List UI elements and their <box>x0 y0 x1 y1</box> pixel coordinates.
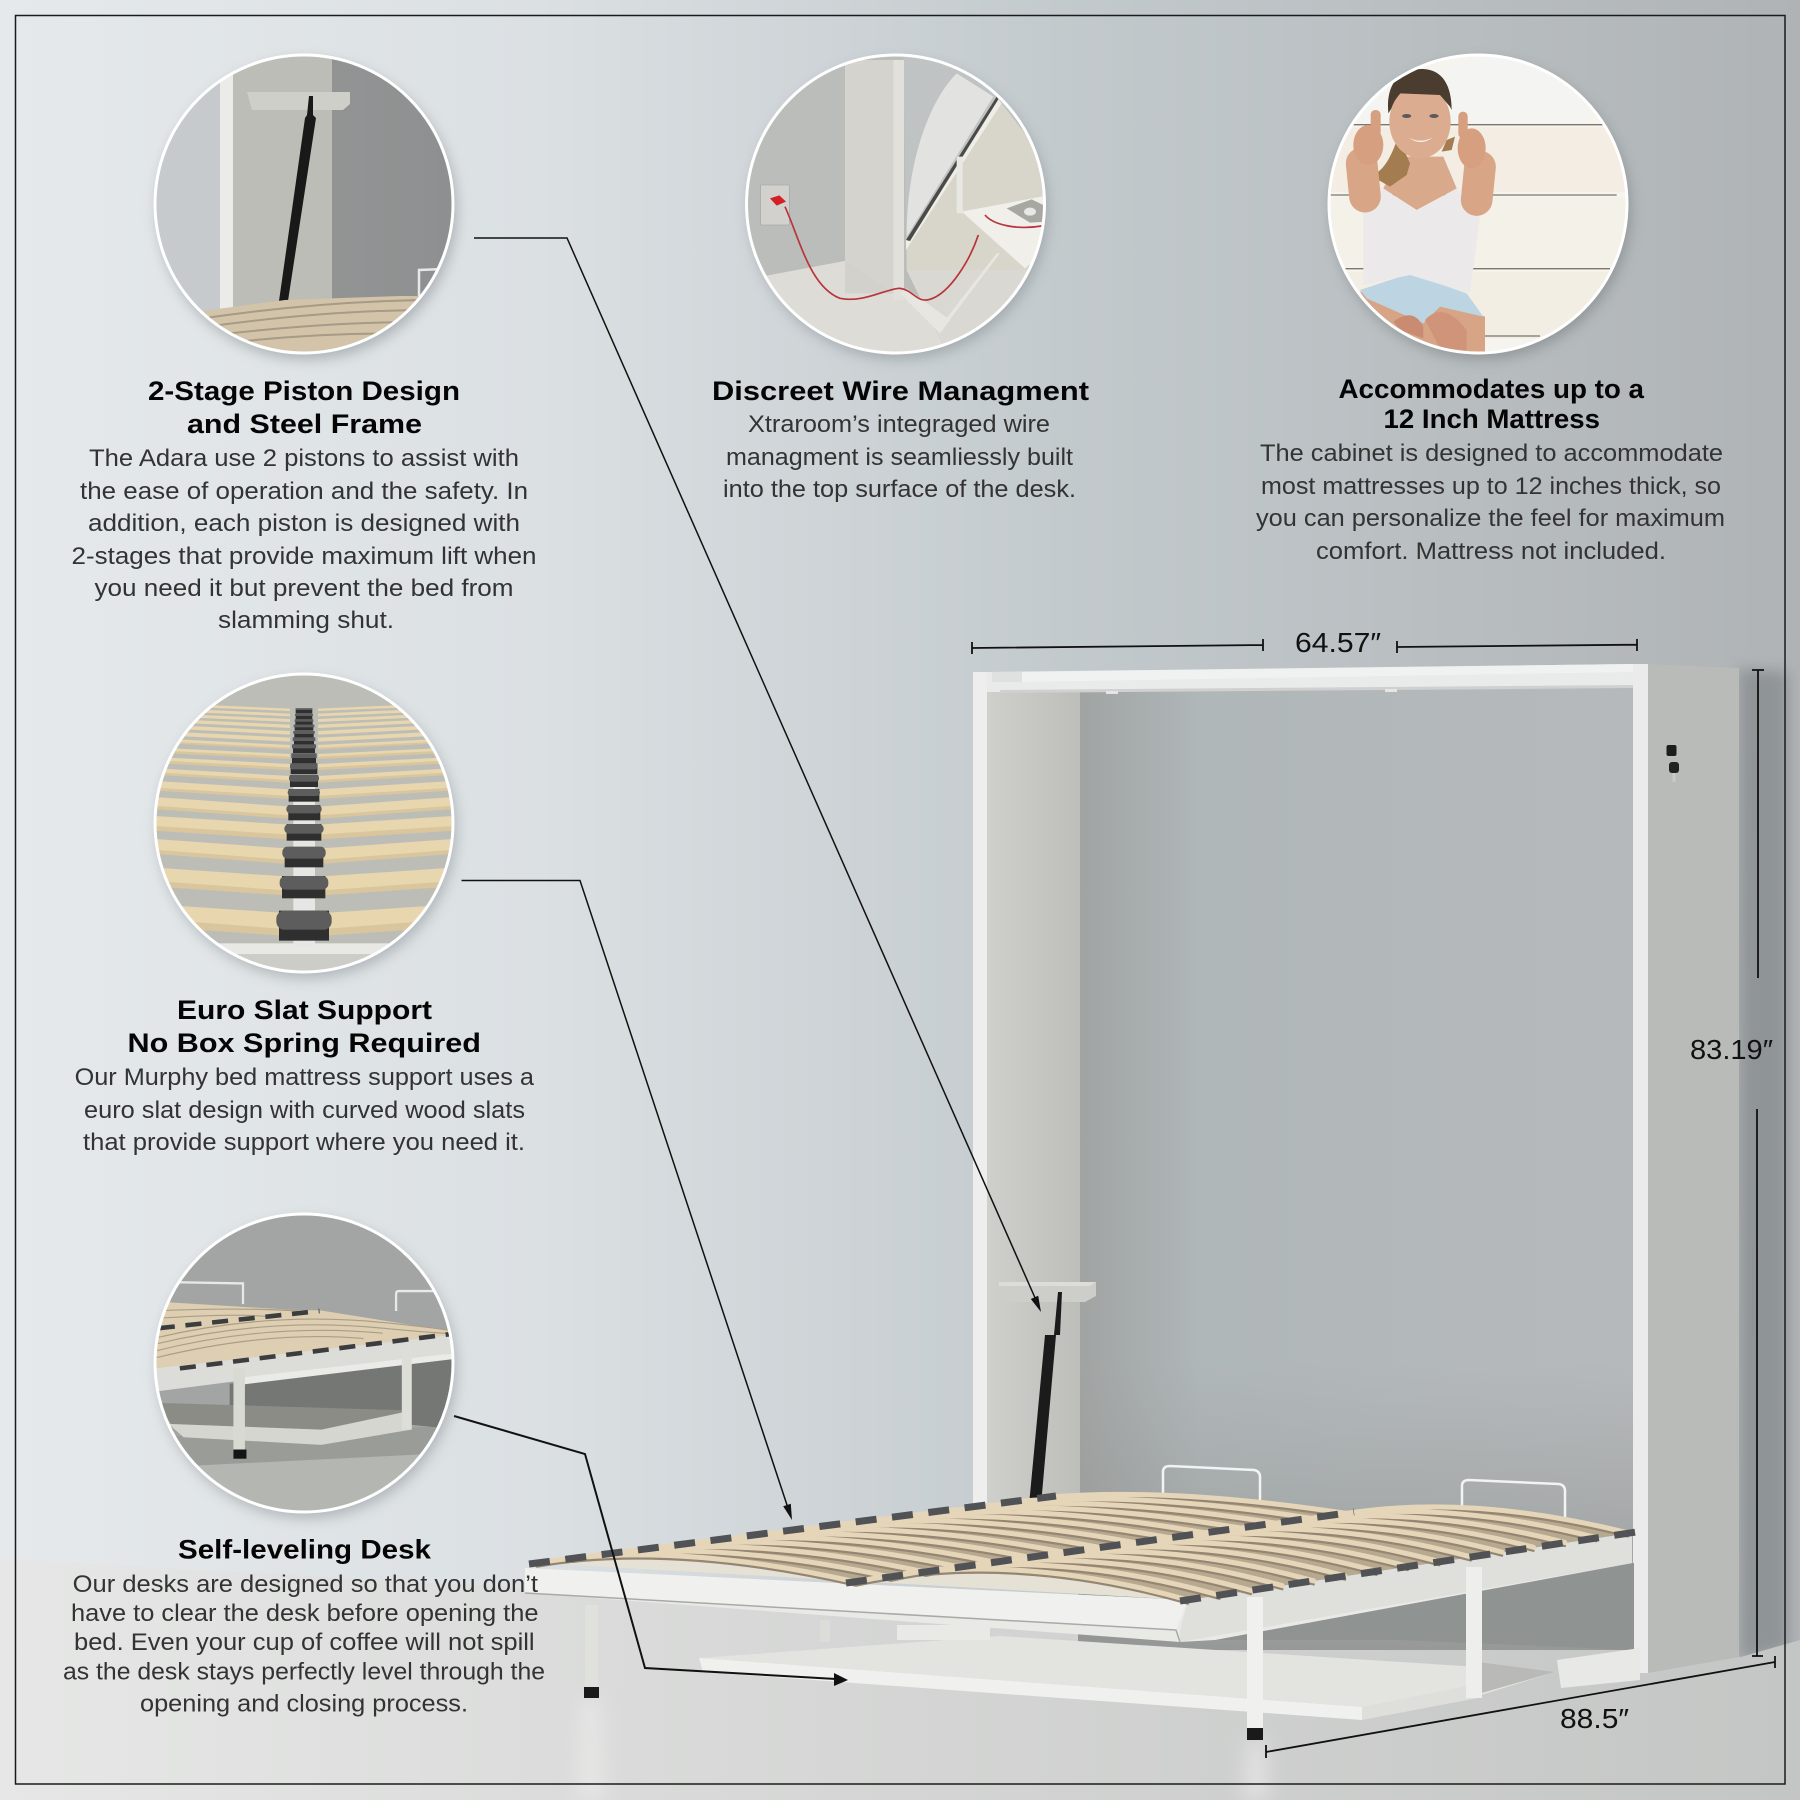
cabinet: back wall interior <box>1078 690 1638 1650</box>
desk tray <box>699 1636 1555 1720</box>
photo: piston close-up <box>155 55 455 360</box>
body text <box>723 411 1076 503</box>
body text: Our desks are designed so that you don’t <box>73 1571 538 1598</box>
panel: mattress feature <box>1256 50 1725 565</box>
slat end caps <box>529 1496 1636 1601</box>
body text: comfort. Mattress not included. <box>1316 538 1666 565</box>
photo: woman with mattresses <box>1330 56 1626 352</box>
under-bed shadow <box>1215 1563 1634 1650</box>
arrow: piston callout <box>474 238 1041 1312</box>
heading <box>128 995 481 1058</box>
photo: desk and bed close-up <box>156 1216 452 1510</box>
dimension: width 64.57: 64.57″ <box>1295 627 1381 658</box>
body text: bed. Even your cup of coffee will not spill <box>74 1629 535 1656</box>
heading: Euro Slat Support <box>177 995 432 1025</box>
heading <box>148 376 460 439</box>
bed underside panels <box>525 1533 1632 1642</box>
heading: Self-leveling Desk <box>178 1535 432 1565</box>
gas piston <box>1029 1292 1062 1505</box>
heading: Accommodates up to a <box>1338 374 1645 404</box>
dimension: width 64.57 <box>972 627 1637 658</box>
cabinet: left side panel <box>973 672 1080 1510</box>
body text <box>72 445 536 634</box>
panel: wire management feature <box>712 53 1089 503</box>
heading: 2-Stage Piston Design <box>148 376 460 406</box>
dimension: depth 88.5: 88.5″ <box>1560 1703 1629 1734</box>
icon: lock and key <box>1666 745 1679 782</box>
dimension: height 83.19 <box>1690 670 1773 1656</box>
dimension: depth 88.5 <box>1266 1656 1775 1758</box>
body text: 2-stages that provide maximum lift when <box>72 543 536 570</box>
body text: Our Murphy bed mattress support uses a <box>75 1064 535 1091</box>
circle shadow <box>158 1220 456 1518</box>
bed handle left <box>1163 1466 1260 1505</box>
body text: euro slat design with curved wood slats <box>84 1097 525 1124</box>
panel: euro slat feature <box>75 667 535 1156</box>
left desk leg <box>584 1605 599 1698</box>
body text: have to clear the desk before opening the <box>71 1600 538 1627</box>
arrow: desk callout <box>454 1416 848 1686</box>
circle border <box>155 1214 453 1512</box>
body text: opening and closing process. <box>140 1691 468 1718</box>
body text: the ease of operation and the safety. In <box>80 478 528 505</box>
photo: desk wiring close-up <box>743 53 1050 360</box>
euro slat deck <box>529 1494 1636 1604</box>
circle shadow <box>158 680 456 978</box>
piston bracket <box>999 1282 1096 1302</box>
rear leg and mechanism <box>820 1620 990 1642</box>
circle border <box>155 55 453 353</box>
base toe kick <box>1557 1648 1640 1688</box>
circle shadow <box>158 61 456 359</box>
dimension: height 83.19: 83.19″ <box>1690 1034 1773 1065</box>
body text: that provide support where you need it. <box>83 1129 525 1156</box>
body text: you can personalize the feel for maximum <box>1256 505 1725 532</box>
murphy bed illustration <box>525 664 1739 1740</box>
body text: you need it but prevent the bed from <box>94 575 514 602</box>
right desk leg <box>1466 1567 1482 1698</box>
panel: piston feature <box>72 55 536 634</box>
front desk leg <box>1247 1597 1263 1740</box>
panel: self-leveling desk feature <box>63 1208 545 1718</box>
heading: 12 Inch Mattress <box>1384 404 1600 434</box>
circle shadow <box>1332 61 1630 359</box>
photo: slat close-up <box>150 667 460 977</box>
body text <box>1256 440 1725 565</box>
cabinet: right side panel <box>1633 664 1739 1673</box>
body text: Xtraroom’s integraged wire <box>748 411 1050 438</box>
cabinet: top header <box>987 664 1633 694</box>
body text <box>75 1064 535 1156</box>
body text: The Adara use 2 pistons to assist with <box>89 445 519 472</box>
heading: and Steel Frame <box>187 409 422 439</box>
body text: addition, each piston is designed with <box>88 510 520 537</box>
heading: No Box Spring Required <box>128 1028 481 1058</box>
body text: most mattresses up to 12 inches thick, so <box>1261 473 1721 500</box>
circle border <box>1329 55 1627 353</box>
body text: as the desk stays perfectly level through the <box>63 1658 545 1686</box>
body text: into the top surface of the desk. <box>723 476 1076 503</box>
body text: slamming shut. <box>218 607 394 634</box>
bed handle right <box>1462 1480 1565 1518</box>
circle border <box>746 55 1044 353</box>
figure <box>1360 292 1485 357</box>
slat connectors <box>279 708 329 941</box>
arrow: euro slat callout <box>462 880 792 1520</box>
body text: The cabinet is designed to accommodate <box>1260 440 1723 467</box>
heading <box>1338 374 1645 434</box>
heading: Discreet Wire Managment <box>712 376 1089 406</box>
circle shadow <box>750 61 1048 359</box>
circle border <box>155 674 453 972</box>
body text <box>63 1571 545 1718</box>
body text: managment is seamliessly built <box>726 444 1073 471</box>
